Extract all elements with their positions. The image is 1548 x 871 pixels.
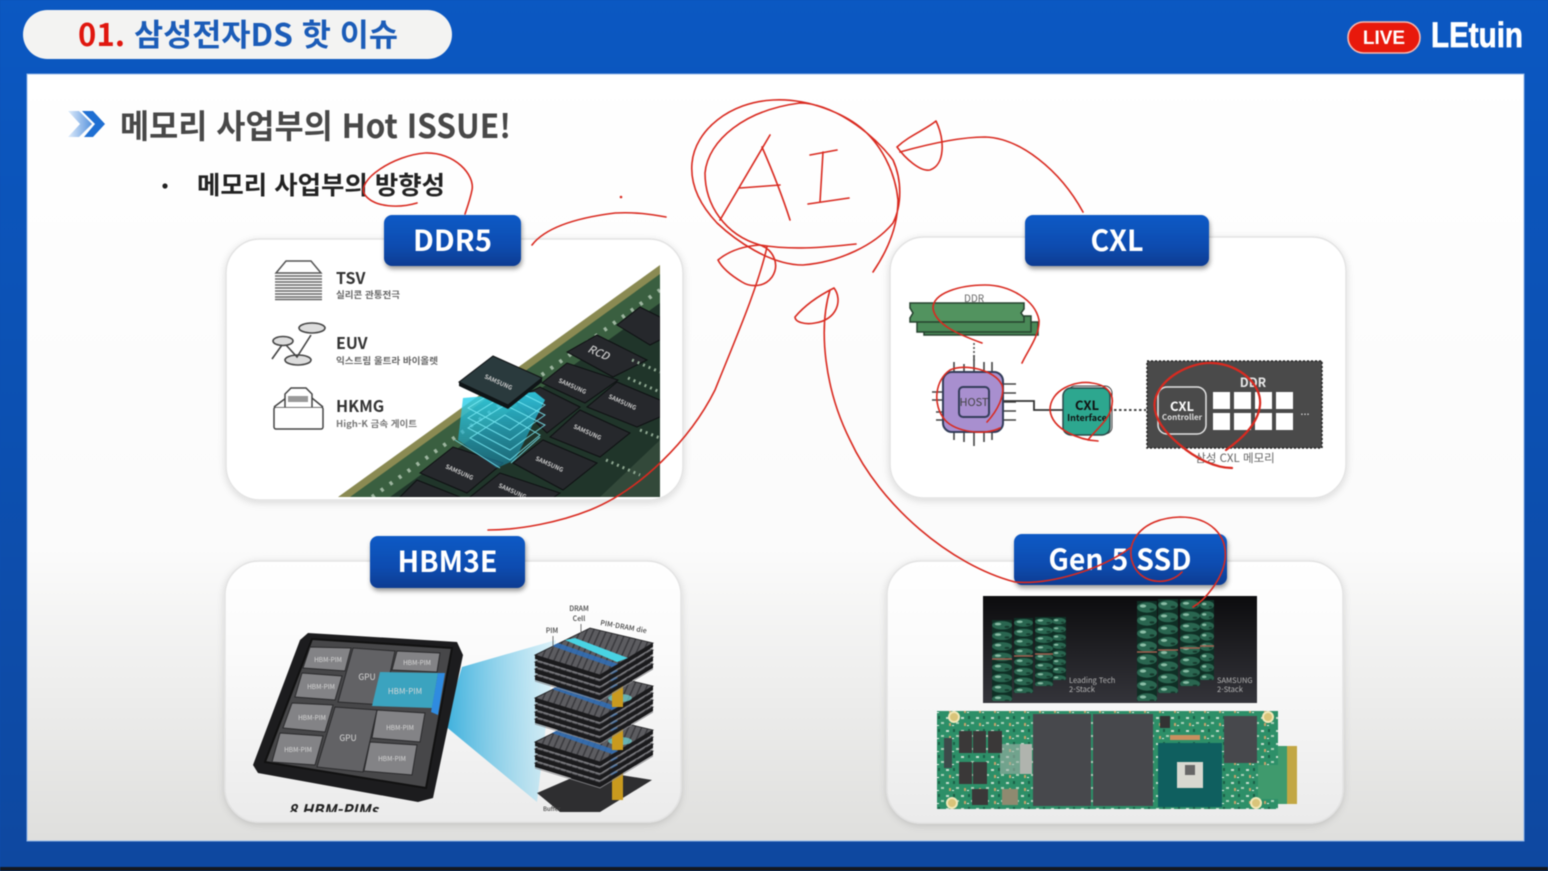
heading: 메모리 사업부의 Hot ISSUE!: [120, 100, 511, 148]
stack labels: Cell: [573, 614, 585, 624]
annotation: handwritten AI: [720, 135, 849, 220]
icon: host chip: [932, 343, 1016, 446]
image: DDR5 memory module: SAMSUNG: [557, 376, 588, 396]
icon: CXL interface: Interface: [1067, 411, 1107, 424]
image: HBM chip package: HBM-PIM: [403, 657, 431, 667]
floating chip: [459, 356, 542, 405]
title pill: 삼성전자DS 핫 이슈: [134, 10, 398, 55]
live badge: [1348, 22, 1420, 53]
live badge: LIVE: [1363, 28, 1405, 49]
image: DDR5 memory module: SAMSUNG: [444, 462, 475, 482]
annotation: arrow to SSD: [795, 288, 1130, 582]
image: V-NAND stacks: SAMSUNG: [1217, 675, 1253, 686]
annotation: arrow to CXL: [897, 121, 1083, 212]
annotation: host circle: [937, 367, 1003, 432]
stack labels: DRAM: [569, 604, 589, 614]
image: DDR5 memory module: SAMSUNG: [607, 392, 638, 412]
panel: CXL memory: ...: [1300, 403, 1310, 419]
label: 8 HBM-PIMs: 8 HBM-PIMs: [288, 797, 380, 821]
annotation: SSD circle: [1131, 517, 1225, 607]
tag: DDR5: [384, 215, 521, 266]
annotation: AI circle: [692, 100, 900, 272]
label: HKMG: HKMG: [336, 393, 384, 417]
stack labels: Buffer: [543, 804, 561, 813]
label: TSV: TSV: [336, 265, 365, 289]
icon: CXL interface: CXL: [1075, 395, 1100, 414]
tag: HBM3E: HBM3E: [398, 539, 498, 581]
label: HKMG: [336, 393, 417, 430]
icon: CXL interface: [1063, 386, 1112, 435]
annotation: DDR circle: [933, 285, 1039, 363]
icon: EUV: [272, 323, 325, 365]
panel: CXL memory: DDR: [1240, 372, 1267, 391]
glow under floating chip: [455, 385, 545, 468]
stack labels: PIM-DRAM die: [599, 618, 648, 636]
panel: DDR5: [226, 239, 683, 501]
annotation: arrow to HBM3E: [488, 245, 776, 530]
image: V-NAND stacks: 2-Stack: [1069, 684, 1096, 695]
tag: CXL: CXL: [1090, 218, 1144, 260]
panel: Gen 5 SSD: [887, 561, 1343, 823]
beam: [444, 640, 556, 802]
dotted link: [1114, 409, 1146, 411]
LEtuin logo: LEtuin: [1431, 16, 1523, 55]
tag: CXL: [1025, 215, 1209, 266]
image: HBM chip package: [253, 633, 463, 802]
annotation: red pen marks: [363, 100, 1260, 607]
image: V-NAND stacks: Leading Tech: [1069, 675, 1115, 686]
tag: HBM3E: [370, 536, 525, 588]
icon: HKMG: [274, 388, 323, 429]
image: SSD board: [937, 711, 1297, 809]
label: TSV: [336, 265, 400, 301]
tag: DDR5: DDR5: [413, 218, 492, 260]
tag: Gen 5 SSD: [1014, 534, 1227, 585]
image: V-NAND stacks: 2-Stack: [1217, 684, 1244, 695]
stack labels: PIM: [546, 626, 558, 636]
image: DDR5 memory module: SAMSUNG: [534, 454, 565, 474]
bullet text: 메모리 사업부의 방향성: [197, 166, 445, 202]
label: HKMG: High-K 금속 게이트: [336, 417, 417, 430]
image: HBM chip package: HBM-PIM: [378, 753, 406, 763]
panel: HBM3E: [225, 561, 681, 822]
title pill: 01.: [78, 10, 125, 55]
stack labels: [543, 604, 648, 813]
label: DDR: DDR: [964, 290, 985, 305]
panel: CXL memory: [1147, 361, 1322, 448]
image: V-NAND stacks: [983, 596, 1257, 703]
annotation: interface circle: [1050, 382, 1112, 441]
annotation: dot: [620, 196, 622, 198]
title pill: [23, 10, 452, 59]
image: HBM chip package: GPU: [358, 671, 376, 683]
label: EUV: [336, 330, 438, 367]
image: HBM chip package: HBM-PIM: [307, 681, 335, 691]
icon: chevrons: [68, 111, 105, 137]
label: TSV: 실리콘 관통전극: [336, 288, 400, 301]
image: stacked DRAM: [535, 628, 653, 812]
image: HBM chip package: HBM-PIM: [284, 744, 312, 754]
tag: Gen 5 SSD: Gen 5 SSD: [1048, 537, 1192, 579]
panel: CXL memory: CXL: [1170, 396, 1195, 415]
image: HBM chip package: GPU: [339, 732, 357, 744]
image: HBM chip package: HBM-PIM: [388, 686, 422, 697]
image: DDR5 memory module: SAMSUNG: [572, 422, 603, 442]
icon: DDR modules: [910, 303, 1038, 335]
icon: TSV: [275, 261, 322, 300]
annotation: controller circle: [1154, 363, 1260, 468]
label: EUV: EUV: [336, 330, 368, 354]
image: DDR5 memory module: RCD: [585, 341, 613, 365]
annotation: arrow to DDR5: [532, 213, 666, 245]
image: DDR5 memory module: SAMSUNG: [497, 481, 528, 501]
annotation: direction circle: [363, 153, 472, 214]
image: HBM chip package: HBM-PIM: [314, 654, 342, 664]
label: EUV: 익스트림 울트라 바이올렛: [336, 354, 438, 367]
panel: CXL: [890, 237, 1346, 498]
icon: host chip: HOST: [959, 394, 989, 410]
image: DDR5 memory module: SAMSUNG: [483, 372, 514, 392]
panel: CXL memory: Controller: [1162, 412, 1203, 423]
label: Samsung CXL memory: 삼성 CXL 메모리: [1195, 450, 1275, 466]
image: HBM chip package: HBM-PIM: [386, 722, 414, 732]
image: HBM chip package: HBM-PIM: [298, 712, 326, 722]
image: DDR5 memory module: [338, 265, 660, 501]
connector line: [1004, 401, 1064, 410]
